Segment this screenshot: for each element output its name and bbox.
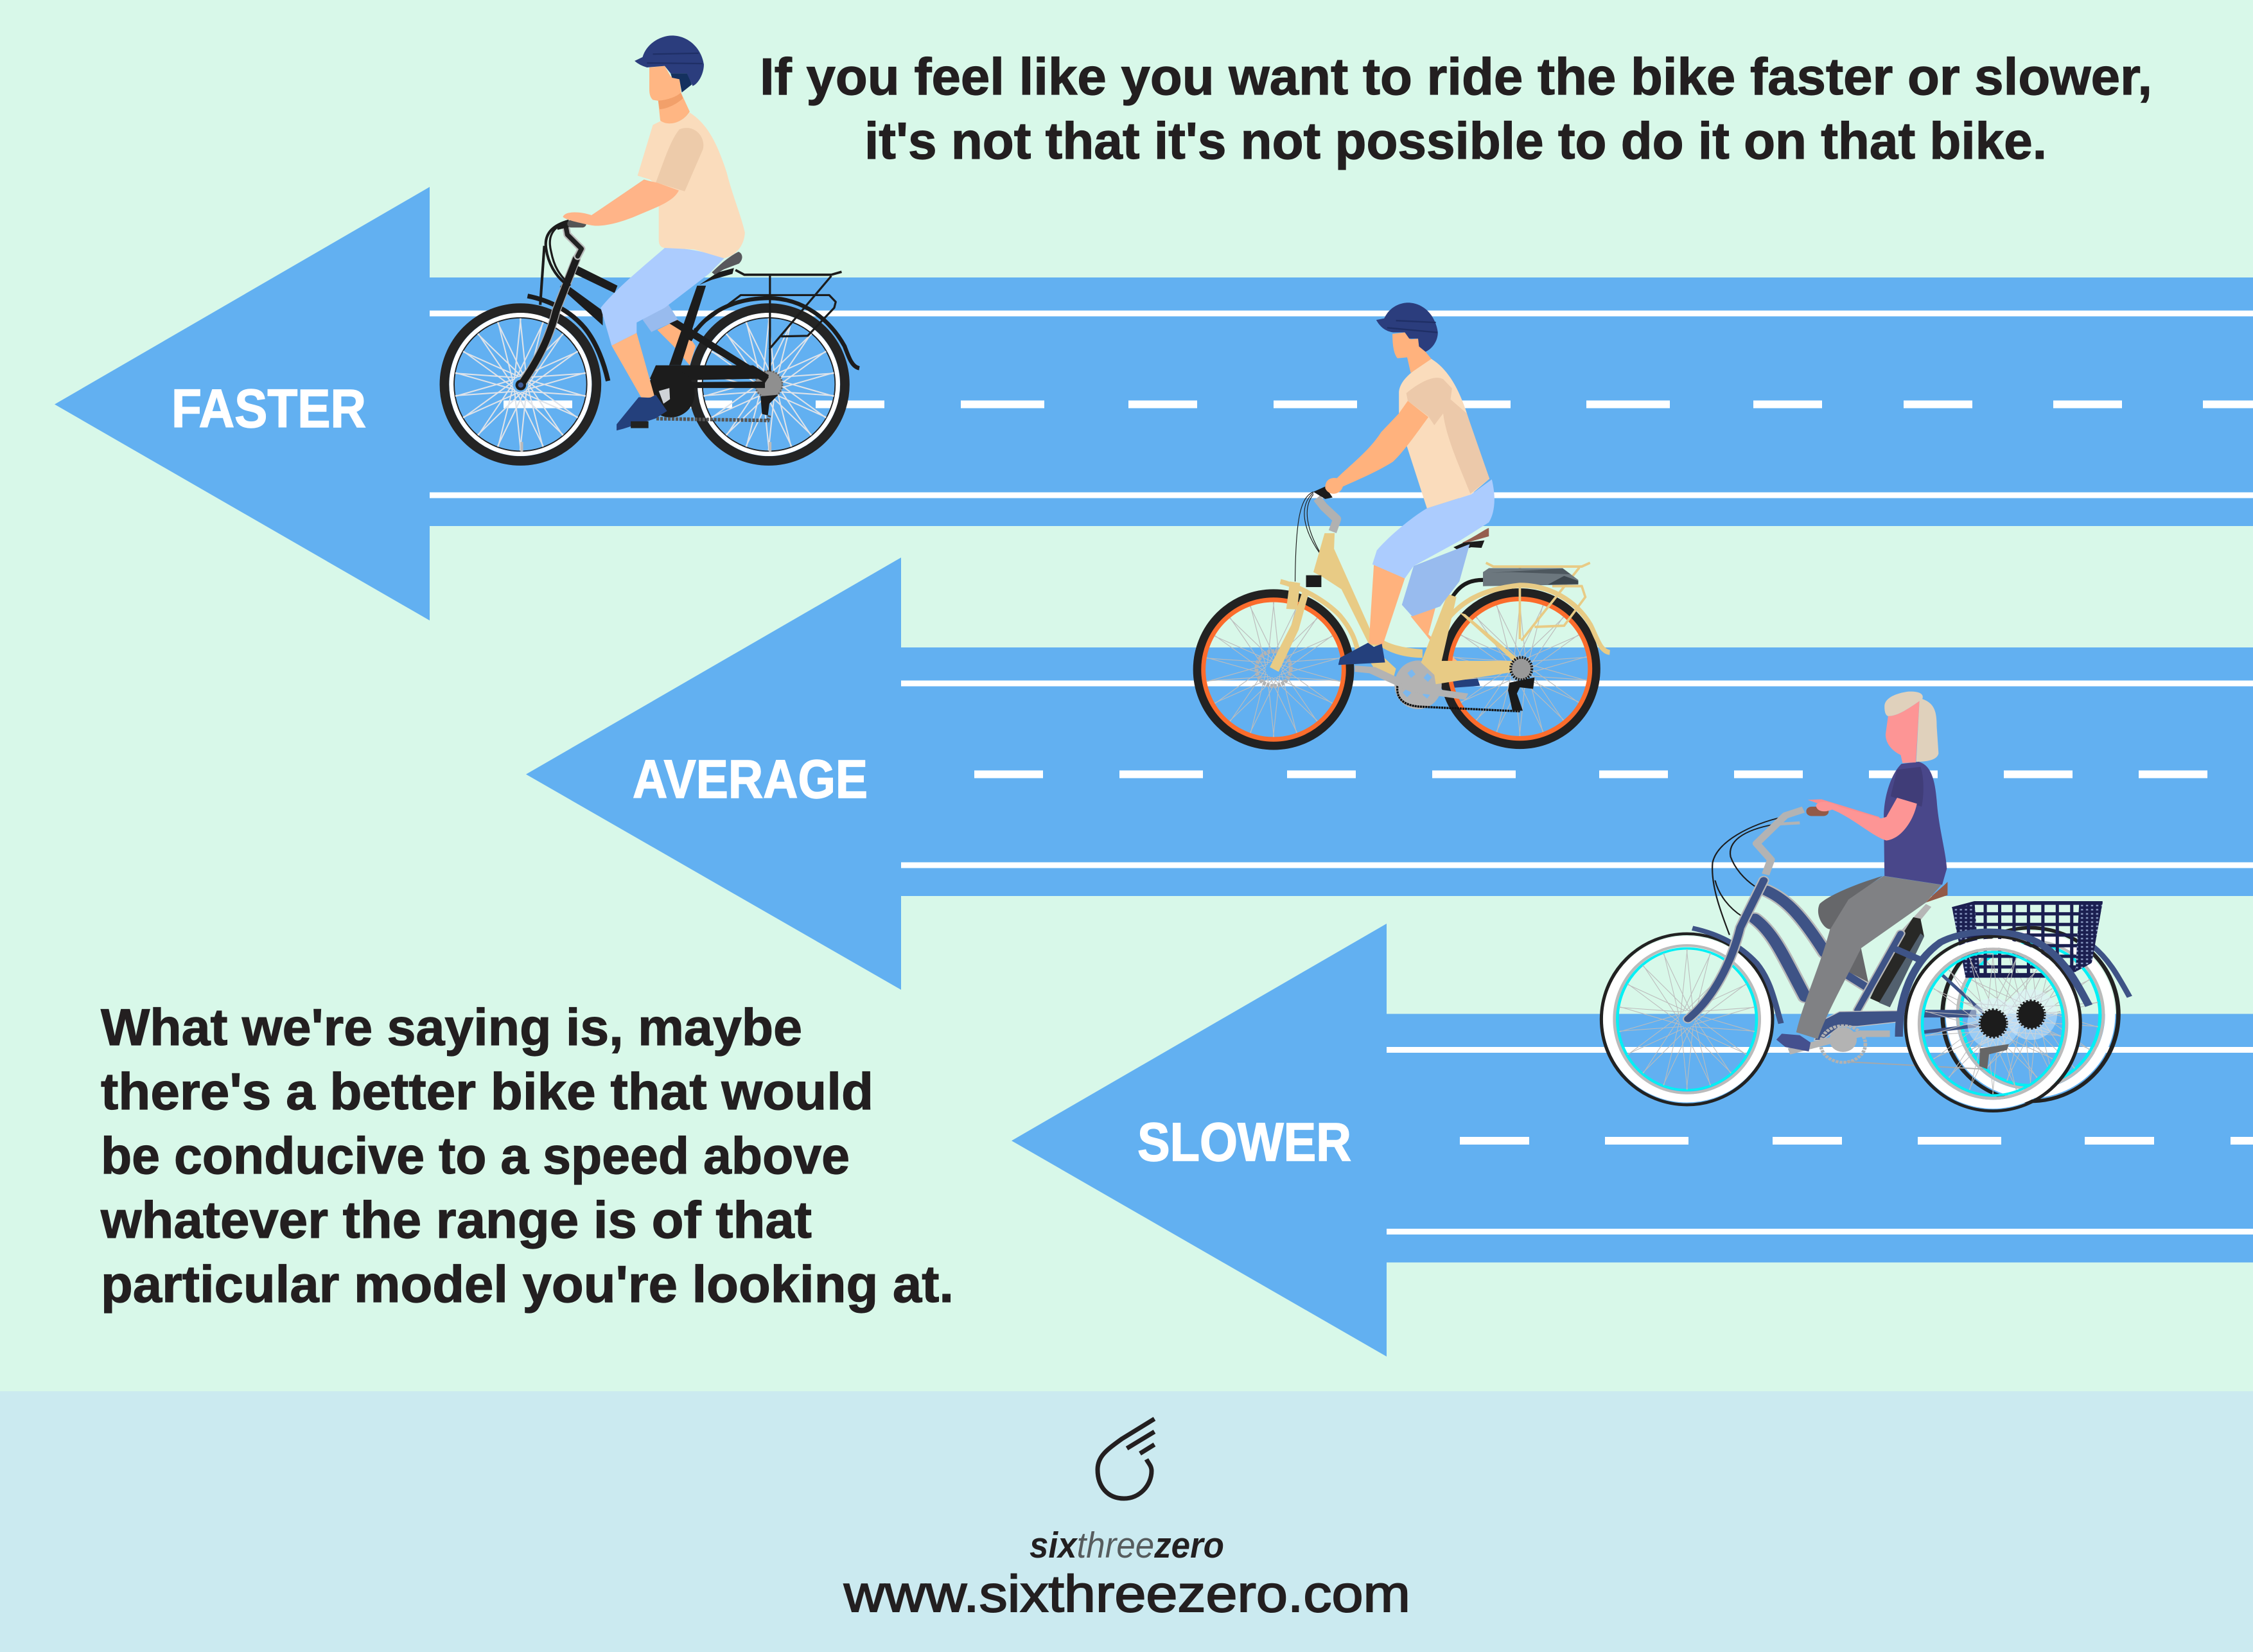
front wheel	[431, 295, 610, 474]
left text block: What we're saying is, maybe	[101, 999, 802, 1057]
front wheel	[1181, 579, 1366, 760]
chainring	[1394, 660, 1520, 711]
fork and head tube	[521, 227, 581, 385]
footer band	[0, 1391, 2253, 1652]
front wheel	[1594, 924, 1780, 1114]
pedal	[631, 421, 649, 428]
handlebar grip	[567, 220, 586, 227]
near fender	[1899, 932, 2089, 1037]
stem top	[1306, 576, 1321, 587]
sleeve	[1891, 767, 1924, 807]
battery cable	[1448, 580, 1483, 605]
front fender	[1692, 928, 1781, 1023]
t-shirt	[1884, 762, 1947, 885]
left text block: be conducive to a speed above	[101, 1127, 850, 1185]
footer logo mark	[1098, 1419, 1155, 1498]
neck shade	[658, 92, 683, 109]
shoe	[617, 395, 667, 430]
rack	[1486, 563, 1590, 640]
cables and handlebar	[540, 221, 576, 305]
far shoe	[1439, 669, 1480, 689]
far arm	[591, 179, 657, 217]
label: faster: FASTER	[171, 378, 366, 439]
far fender	[2092, 945, 2130, 997]
top text block: it's not that it's not possible to do it on that bike.	[864, 112, 2047, 170]
average road arrow	[526, 558, 2253, 990]
chain	[656, 416, 769, 421]
stem	[1317, 498, 1337, 532]
frame	[1270, 533, 1524, 684]
left text block: there's a better bike that would	[101, 1063, 873, 1121]
fenders and rack	[527, 270, 859, 381]
grip	[1806, 807, 1828, 816]
helmet	[1376, 303, 1438, 352]
chainring	[1789, 1026, 1984, 1069]
cassette	[1511, 658, 1532, 680]
far rear wheel	[1938, 920, 2123, 1110]
far arm	[1808, 799, 1884, 827]
derailleur	[1979, 1044, 2009, 1069]
hair	[1884, 692, 1938, 762]
footer url: www.sixthreezero.com	[843, 1565, 1410, 1623]
bike 1: rider on black bicycle	[431, 35, 859, 474]
helmet grooves	[647, 53, 703, 64]
slower road arrow	[1012, 924, 2253, 1357]
t-shirt	[1399, 359, 1489, 508]
pants	[1796, 876, 1942, 1039]
near leg	[1369, 565, 1405, 646]
brake lever	[1775, 823, 1800, 824]
arm	[1325, 401, 1428, 494]
t-shirt	[638, 112, 745, 258]
far leg	[1411, 606, 1468, 670]
left text block: particular model you're looking at.	[101, 1256, 954, 1314]
stays	[1922, 973, 1984, 1032]
crank	[659, 388, 670, 403]
saddle	[1462, 528, 1489, 543]
stem	[1757, 809, 1803, 874]
seat post	[1444, 557, 1457, 589]
near leg	[611, 333, 654, 399]
rear wheel	[679, 295, 859, 474]
left text block	[100, 999, 954, 1314]
saddle post	[1897, 904, 1931, 938]
shorts	[1372, 479, 1495, 578]
shirt shade	[1407, 378, 1489, 494]
derailleur	[1508, 678, 1534, 710]
cables	[1712, 816, 1785, 935]
saddle	[712, 252, 742, 275]
near rear wheel	[1900, 929, 2086, 1119]
fork	[1688, 881, 1764, 1019]
faster road arrow	[55, 187, 2253, 620]
label: slower: SLOWER	[1137, 1112, 1351, 1172]
lower frame shell	[1814, 1011, 1898, 1041]
shoe	[1776, 1033, 1810, 1051]
far leg	[657, 320, 696, 365]
bike 2: rider on cream bicycle with orange rims	[1181, 303, 1612, 760]
battery	[1483, 568, 1578, 586]
basket	[1952, 902, 2103, 978]
sleeve shade	[656, 128, 703, 191]
crank and pedal	[1354, 665, 1468, 699]
helmet grooves	[1387, 321, 1437, 333]
shoe	[1338, 643, 1385, 665]
thigh shade	[1818, 876, 1882, 929]
head	[1392, 333, 1432, 373]
hub cap	[518, 382, 523, 388]
helmet	[635, 35, 704, 86]
cassettes	[1967, 989, 2057, 1049]
bike 3: rider on blue tricycle with basket	[1594, 692, 2130, 1119]
cables	[1295, 492, 1328, 581]
footer brand name: sixthreezero	[1030, 1525, 1224, 1566]
saddle	[1926, 882, 1947, 902]
frame	[560, 266, 778, 417]
fenders	[1281, 581, 1610, 653]
label: average: AVERAGE	[633, 749, 868, 809]
far shorts	[1402, 544, 1469, 617]
battery	[1870, 917, 1924, 1007]
arm	[1816, 798, 1917, 841]
head	[649, 66, 690, 123]
face	[1886, 701, 1920, 763]
top text block: If you feel like you want to ride the bike faster or slower,	[760, 48, 2152, 106]
hair	[671, 73, 692, 92]
hub	[516, 380, 526, 391]
shorts	[601, 248, 724, 346]
far pants	[1848, 948, 1868, 982]
seat clamp	[1451, 553, 1458, 563]
far shorts	[642, 303, 678, 332]
rear wheel	[1428, 577, 1612, 760]
near arm	[563, 180, 679, 226]
saddle rail	[1453, 540, 1484, 551]
left text block: whatever the range is of that	[100, 1191, 812, 1249]
handlebar	[1313, 486, 1333, 499]
frame	[1755, 891, 1920, 1010]
top text block	[760, 48, 2152, 170]
